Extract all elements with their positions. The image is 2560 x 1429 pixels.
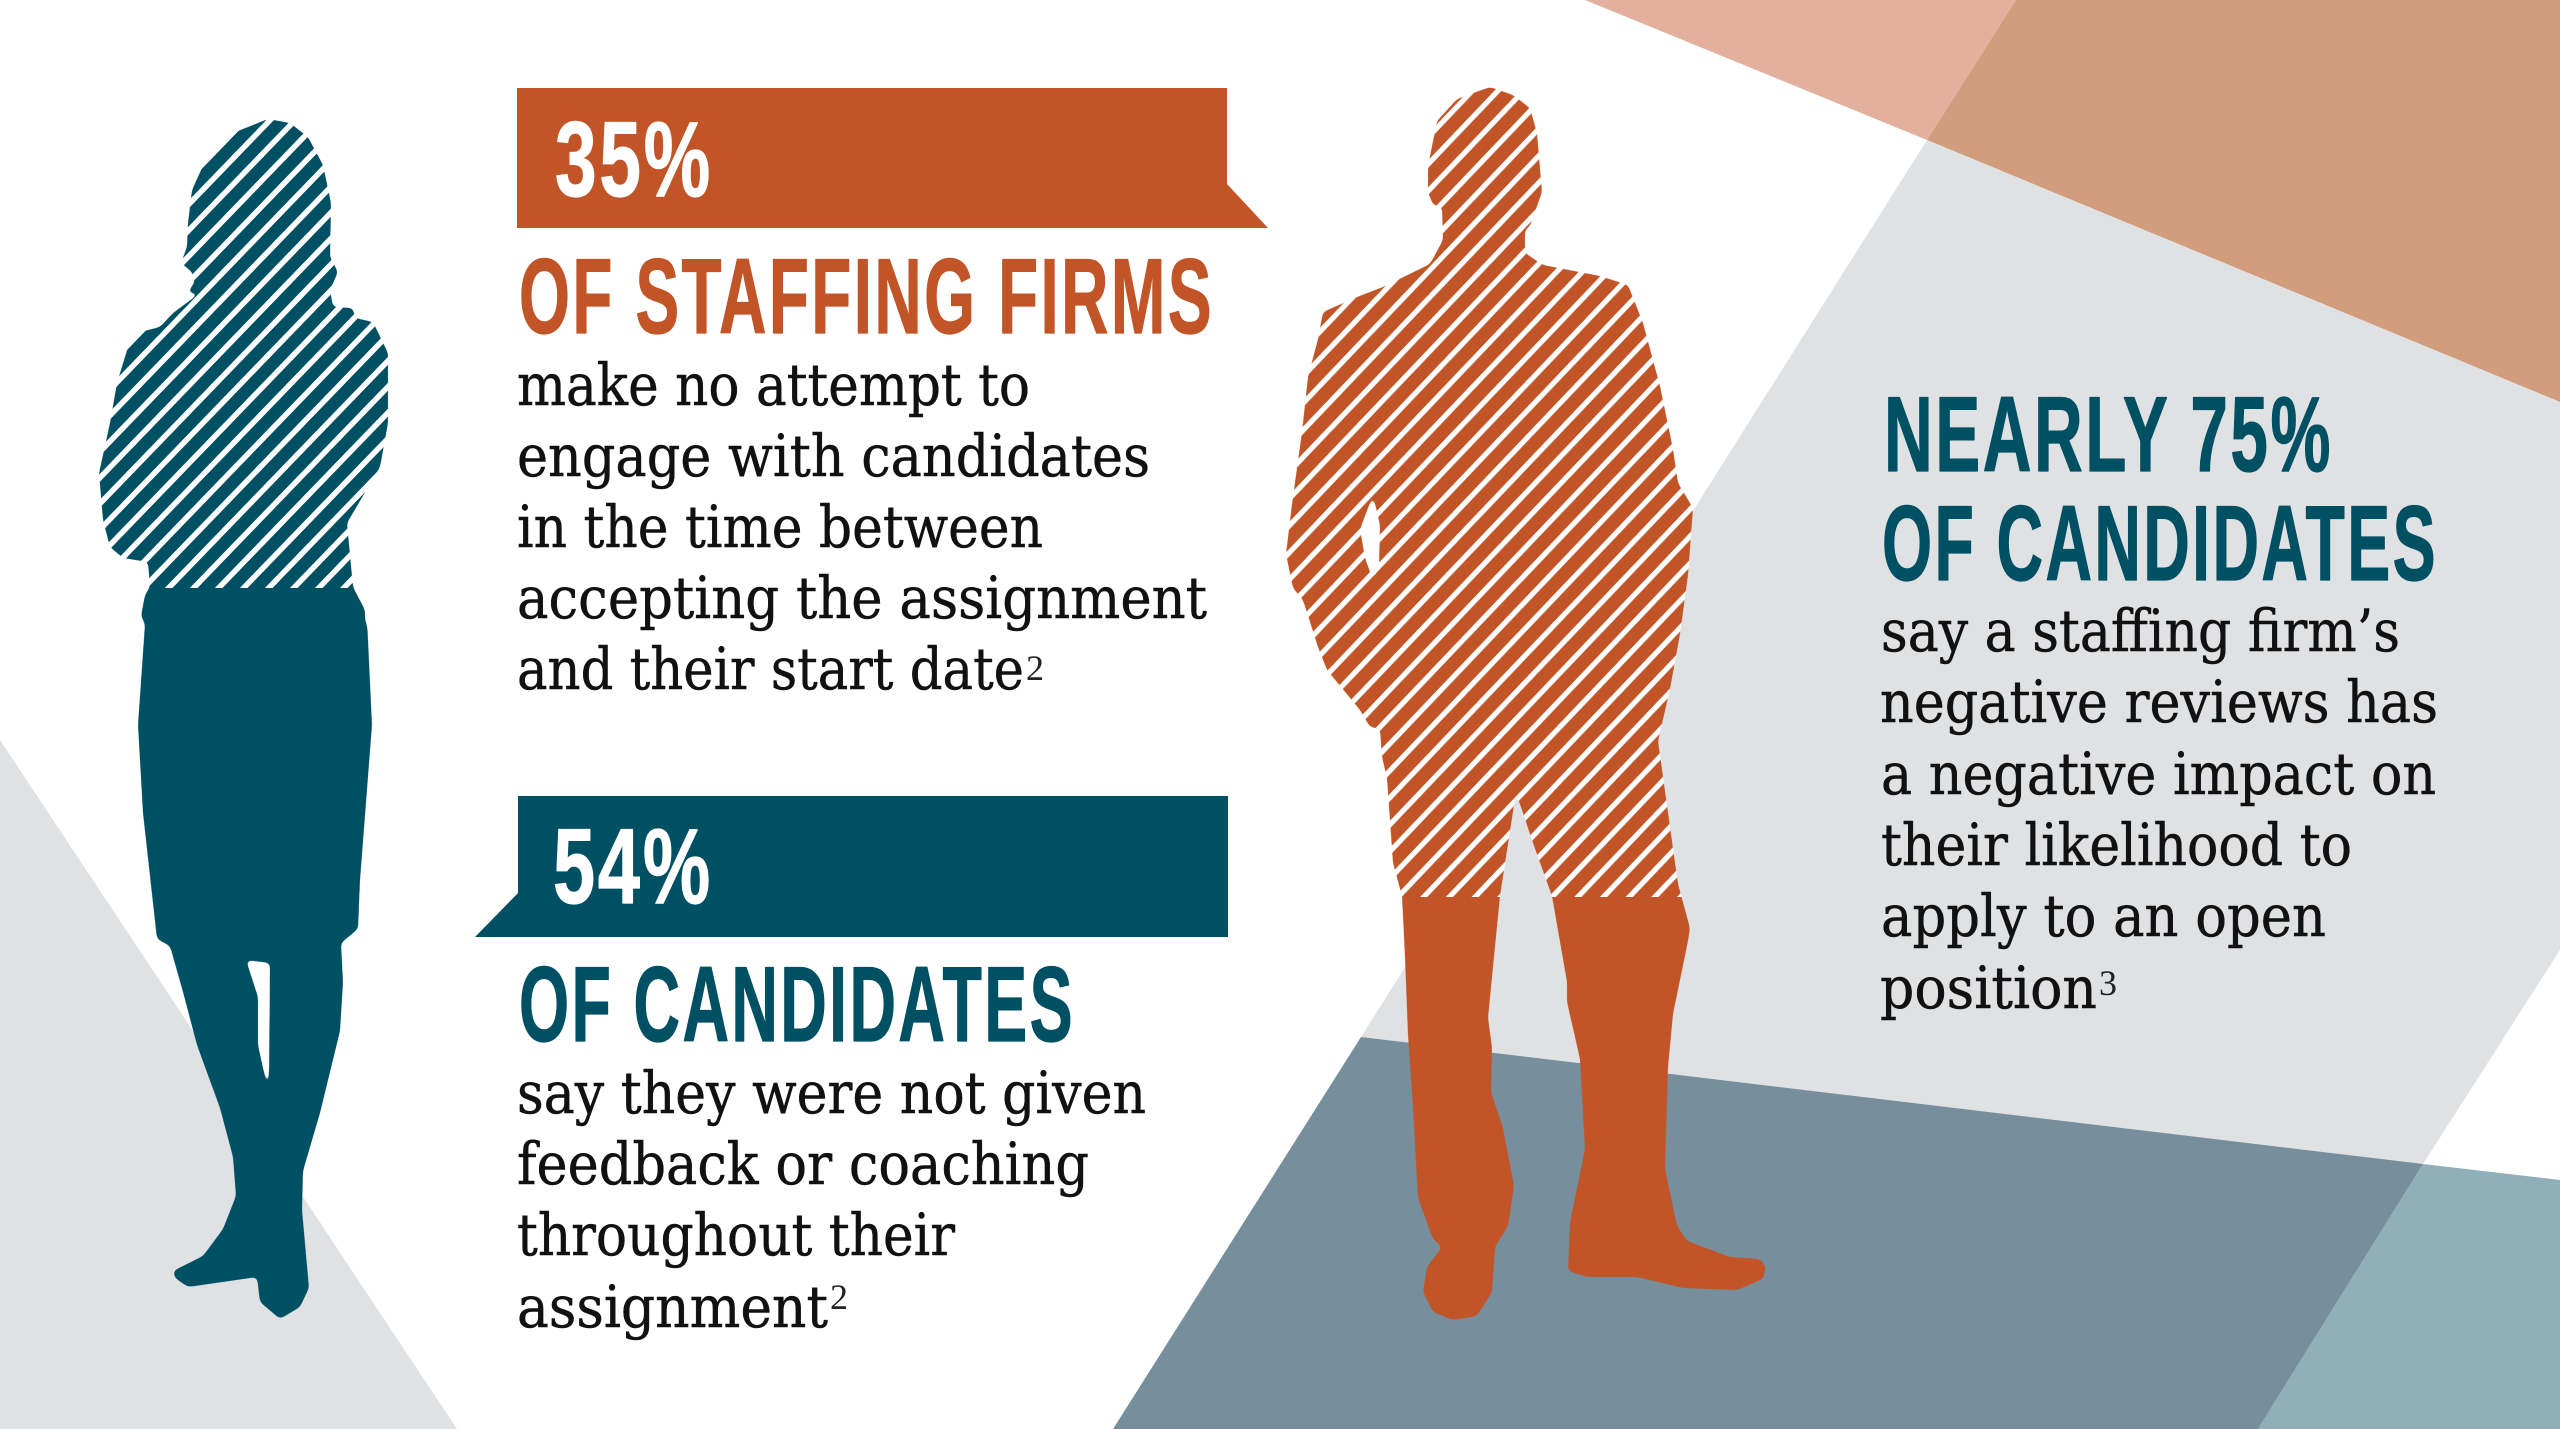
- text block: staffing firms description: accepting the assignment: [517, 564, 1207, 632]
- text block: staffing firms description: engage with candidates: [517, 422, 1150, 490]
- text block: candidates feedback description: feedback or coaching: [517, 1130, 1089, 1198]
- background shape: grey triangle bottom left: [0, 740, 457, 1429]
- background shape: grey panel: [1361, 140, 2560, 1164]
- text block: candidates feedback description: 2: [830, 1277, 848, 1317]
- icon: man silhouette, striped above the knee: [1280, 80, 1775, 1325]
- ribbon: 35%: [517, 88, 1268, 228]
- text block: negative reviews description: say a staffing firm’s: [1881, 597, 2400, 665]
- text block: negative reviews description: negative reviews has: [1880, 668, 2438, 736]
- text block: staffing firms description: 2: [1026, 648, 1044, 688]
- background shape: teal corner: [2258, 1164, 2560, 1429]
- text block: candidates feedback description: assignment: [517, 1273, 828, 1341]
- text block: negative reviews description: 3: [2099, 963, 2117, 1003]
- text block: candidates feedback description: [517, 1059, 1146, 1341]
- background shape: slate floor: [1113, 1037, 2423, 1429]
- panel: 54% of candidates: [475, 796, 1228, 1341]
- text block: staffing firms description: make no attempt to: [517, 351, 1030, 419]
- text block: candidates feedback description: say they were not given: [517, 1059, 1146, 1127]
- text block: candidates feedback description: throughout their: [517, 1201, 955, 1269]
- text block: staffing firms description: in the time between: [517, 493, 1043, 561]
- ribbon: 35%: 35%: [555, 99, 713, 219]
- ribbon: 54%: 54%: [553, 806, 713, 926]
- text block: negative reviews description: [1880, 597, 2438, 1022]
- ribbon: 54%: [475, 796, 1228, 937]
- heading: of staffing firms: OF STAFFING FIRMS: [519, 236, 1214, 356]
- text block: staffing firms description: [517, 351, 1207, 703]
- panel: 35% of staffing firms: [517, 88, 1268, 703]
- icon: woman silhouette, striped above the waist: [90, 110, 400, 1325]
- text block: negative reviews description: position: [1880, 954, 2097, 1022]
- background shape: pink wedge: [1585, 0, 2016, 140]
- background shape: tan wedge: [1927, 0, 2560, 402]
- text block: negative reviews description: their likelihood to: [1881, 811, 2352, 879]
- panel: nearly 75% of candidates: [1880, 374, 2438, 1022]
- text block: staffing firms description: and their start date: [517, 635, 1024, 703]
- heading: of candidates: OF CANDIDATES: [519, 944, 1075, 1064]
- text block: negative reviews description: a negative impact on: [1881, 740, 2436, 808]
- text block: negative reviews description: apply to an open: [1881, 882, 2326, 950]
